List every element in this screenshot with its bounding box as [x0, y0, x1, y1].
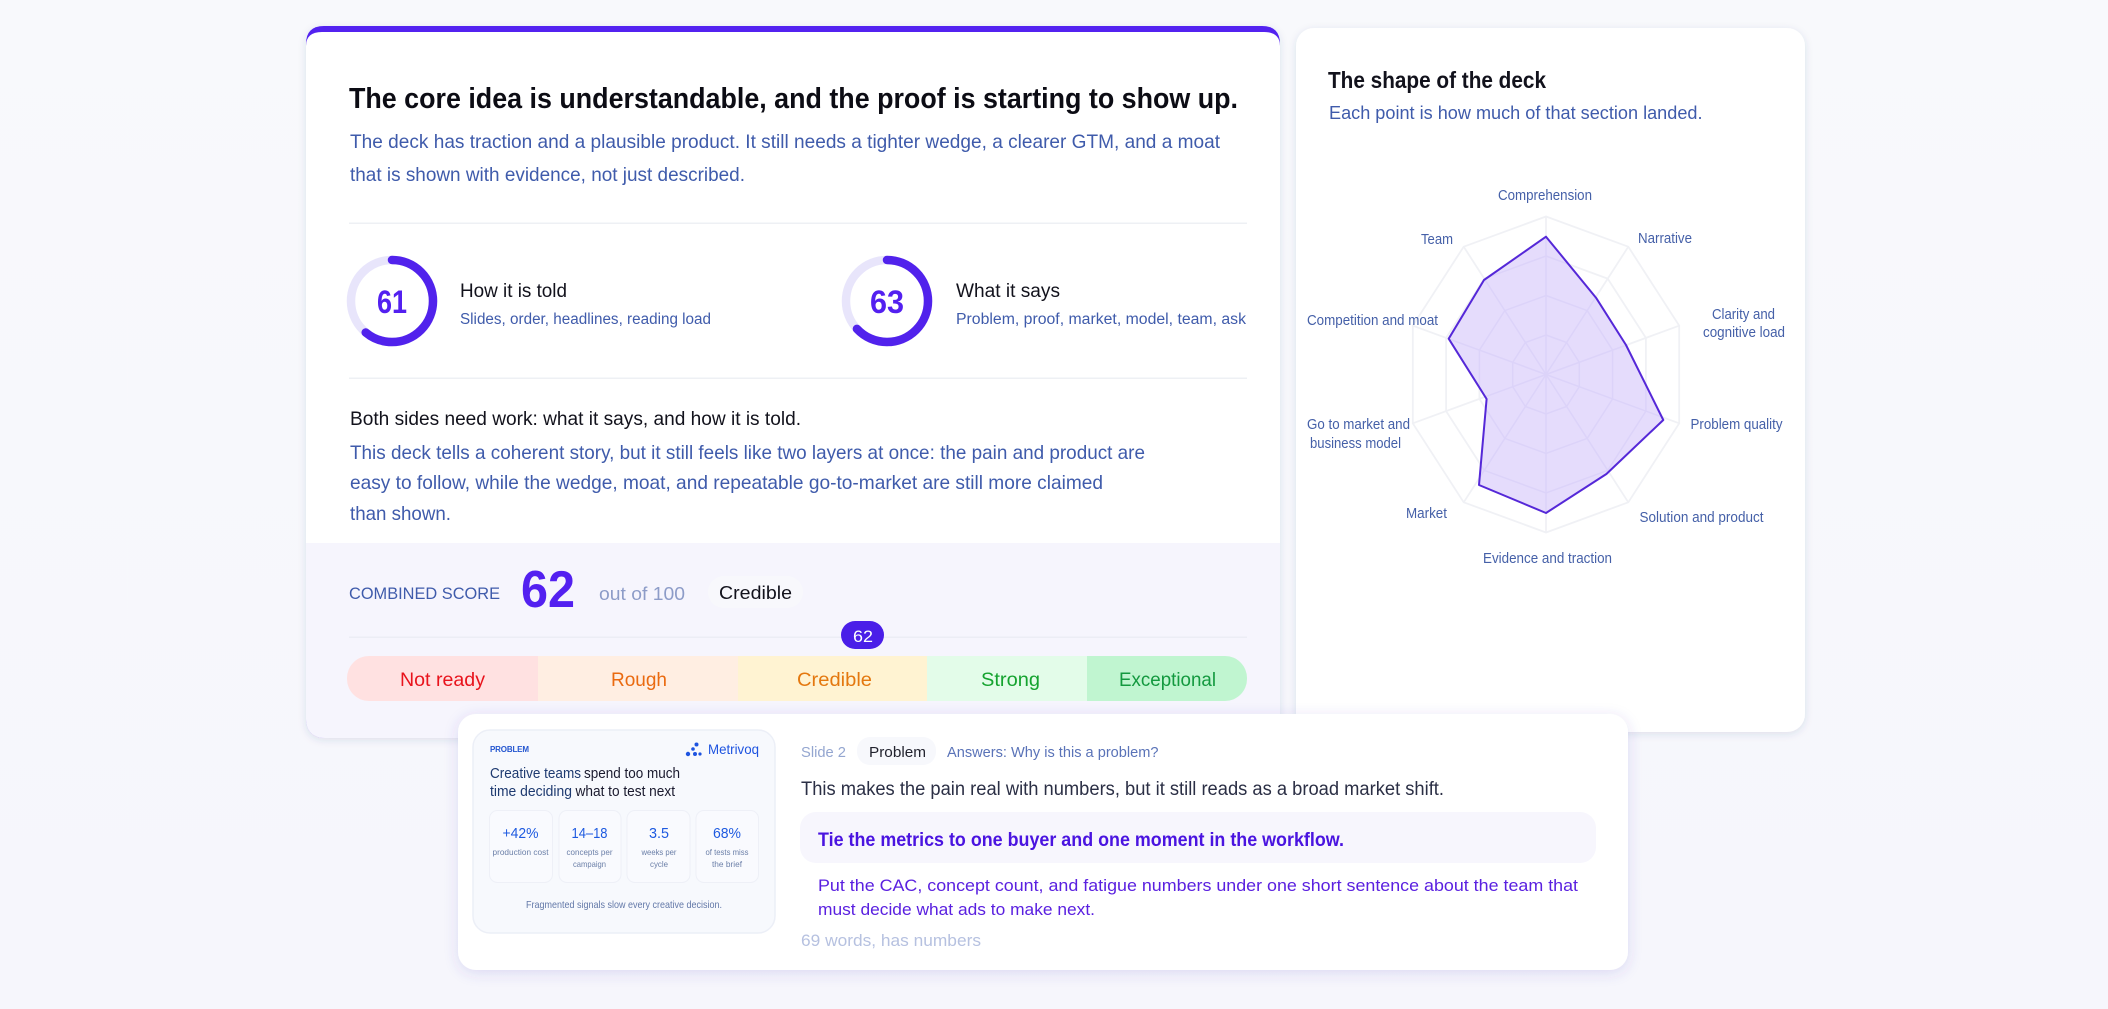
- radar axis labels: [1307, 188, 1785, 567]
- slide headline: what to test next: [575, 784, 675, 800]
- radar axis labels: Clarity and: [1712, 307, 1775, 323]
- icon: metrivoq logo: [686, 742, 702, 756]
- problem pill: Problem: [869, 744, 926, 761]
- recommendation detail: must decide what ads to make next.: [818, 901, 1095, 919]
- metric tiles: of tests miss: [706, 847, 748, 857]
- combined score section: [306, 543, 1280, 738]
- combined score section: out of 100: [599, 584, 685, 604]
- word count note: 69 words, has numbers: [801, 931, 981, 950]
- score marker: [841, 621, 884, 649]
- both sides text block: [350, 409, 1145, 525]
- recommendation highlight: [800, 812, 1596, 863]
- summary text: The deck has traction and a plausible product. It still needs a tighter wedge, a clearer GTM, and a moat: [350, 131, 1221, 153]
- summary text: that is shown with evidence, not just described.: [350, 164, 745, 186]
- metric tiles: 14–18: [572, 826, 608, 842]
- score: what it says: Problem, proof, market, model, team, ask: [956, 311, 1246, 328]
- score marker: 62: [853, 627, 873, 646]
- radar axis labels: Narrative: [1638, 231, 1692, 247]
- title: The core idea is understandable, and the proof is starting to show up.: [349, 83, 1238, 115]
- problem pill: [857, 737, 936, 765]
- ring gauge 61: 61: [377, 284, 407, 320]
- radar axis labels: Solution and product: [1640, 510, 1764, 526]
- radar axis labels: Market: [1406, 506, 1447, 522]
- score: how it is told: How it is told: [460, 281, 567, 302]
- radar data shape: [1449, 237, 1663, 513]
- metric tiles: weeks per: [641, 847, 677, 857]
- summary text: [350, 131, 1221, 186]
- panel: summary card: [306, 26, 1280, 738]
- metric tiles: cycle: [650, 859, 668, 869]
- score: how it is told: [351, 260, 711, 342]
- radar axis labels: Comprehension: [1498, 188, 1592, 204]
- metric tiles: production cost: [492, 847, 549, 857]
- radar axis labels: Problem quality: [1690, 417, 1783, 433]
- radar axis labels: cognitive load: [1703, 325, 1785, 341]
- credible pill: [708, 576, 803, 608]
- recommendation detail: [818, 877, 1578, 919]
- slide thumbnail: [473, 730, 775, 933]
- recommendation highlight: Tie the metrics to one buyer and one moment in the workflow.: [818, 829, 1344, 851]
- score scale bar: [347, 656, 1247, 701]
- slide meta row: Slide 2: [801, 744, 846, 761]
- metric tiles: [490, 810, 758, 882]
- panel: slide feedback card: [458, 714, 1628, 970]
- slide headline: spend too much: [584, 766, 680, 782]
- score scale bar: Not ready: [400, 669, 485, 691]
- ring gauge 63: 63: [870, 284, 904, 320]
- metric tiles: concepts per: [566, 847, 613, 857]
- radar heading: The shape of the deck: [1328, 67, 1546, 93]
- radar axis labels: Competition and moat: [1307, 313, 1438, 329]
- slide meta row: [801, 737, 1158, 765]
- slide headline: time deciding: [490, 784, 572, 800]
- slide meta row: Answers: Why is this a problem?: [947, 745, 1158, 761]
- panel: radar card: [1296, 28, 1805, 732]
- ring gauge 63: [846, 260, 928, 342]
- recommendation detail: Put the CAC, concept count, and fatigue numbers under one short sentence about the team that: [818, 877, 1578, 895]
- combined score value: 62: [521, 561, 575, 619]
- radar axis labels: business model: [1310, 436, 1401, 452]
- radar axis labels: Go to market and: [1307, 417, 1410, 433]
- slide critique: This makes the pain real with numbers, but it still reads as a broad market shift.: [801, 779, 1444, 800]
- combined score section: COMBINED SCORE: [349, 584, 500, 603]
- slide thumbnail: Fragmented signals slow every creative decision.: [526, 899, 722, 911]
- metric tiles: 68%: [713, 826, 741, 842]
- radar axis labels: Team: [1421, 232, 1453, 248]
- metric tiles: +42%: [502, 826, 539, 842]
- slide thumbnail: Metrivoq: [708, 741, 759, 757]
- both sides text block: This deck tells a coherent story, but it still feels like two layers at once: the pain and product are: [350, 442, 1145, 464]
- score scale bar: Strong: [981, 669, 1040, 691]
- credible pill: Credible: [719, 583, 792, 603]
- score: what it says: [846, 260, 1246, 342]
- ring gauge 61: [351, 260, 433, 342]
- radar axis labels: Evidence and traction: [1483, 551, 1612, 567]
- metric tiles: campaign: [573, 859, 606, 869]
- both sides text block: than shown.: [350, 503, 451, 525]
- both sides text block: Both sides need work: what it says, and how it is told.: [350, 409, 801, 430]
- radar subtitle: Each point is how much of that section landed.: [1329, 103, 1702, 123]
- slide headline: [490, 766, 680, 800]
- score: how it is told: Slides, order, headlines, reading load: [460, 311, 711, 328]
- slide thumbnail: PROBLEM: [490, 745, 529, 754]
- radar chart: [1307, 188, 1785, 567]
- score scale bar: Credible: [797, 669, 872, 691]
- metric tiles: 3.5: [649, 826, 669, 842]
- score scale bar: Rough: [611, 669, 667, 691]
- score: what it says: What it says: [956, 281, 1060, 302]
- both sides text block: easy to follow, while the wedge, moat, and repeatable go-to-market are still more claimed: [350, 472, 1103, 494]
- slide headline: Creative teams: [490, 766, 581, 782]
- metric tiles: the brief: [712, 859, 743, 869]
- score scale bar: Exceptional: [1119, 669, 1216, 691]
